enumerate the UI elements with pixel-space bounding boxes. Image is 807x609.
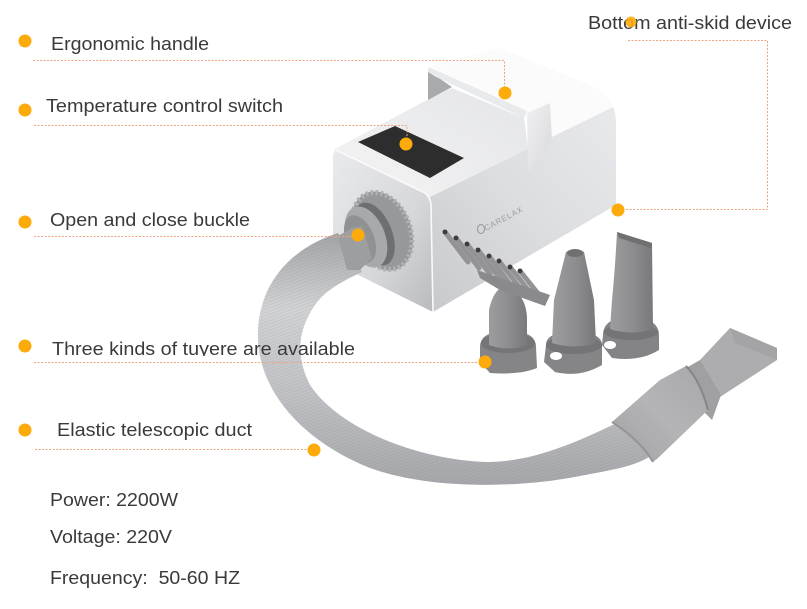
top face — [333, 88, 528, 197]
label: Ergonomic handle: Ergonomic handle — [51, 33, 209, 54]
hose end flat nozzle — [612, 328, 777, 462]
comb nozzle rods — [445, 232, 540, 296]
air outlet knob and collar — [336, 182, 424, 280]
spec: power: Power: 2200W — [50, 490, 178, 510]
label: Temperature control switch: Temperature control switch — [46, 95, 283, 116]
nozzle: round cone — [544, 249, 602, 374]
label: Elastic telescopic duct: Elastic telescopic duct — [57, 419, 252, 440]
label: Open and close buckle: Open and close buckle — [50, 209, 250, 230]
handle top block — [430, 48, 613, 140]
spec: voltage: Voltage: 220V — [50, 527, 172, 547]
handle grip — [428, 67, 552, 172]
marker dots — [18, 16, 636, 456]
dashed leader lines — [33, 40, 768, 450]
spec: frequency: Frequency: 50-60 HZ — [50, 568, 240, 588]
product: dryer body — [333, 48, 616, 312]
label: Three kinds of tuyere: Three kinds of tuyere are available — [52, 338, 355, 359]
comb nozzle rod tips — [443, 230, 522, 273]
brand logo: CARELAX — [483, 205, 525, 233]
hose duct — [258, 233, 652, 485]
label: Bottom anti-skid device: Bottom anti-skid device — [588, 12, 792, 33]
nozzle: flat — [602, 232, 659, 359]
front face — [333, 150, 433, 312]
nozzle: comb — [477, 270, 550, 373]
right side face — [430, 107, 616, 312]
control panel screen — [358, 126, 464, 178]
